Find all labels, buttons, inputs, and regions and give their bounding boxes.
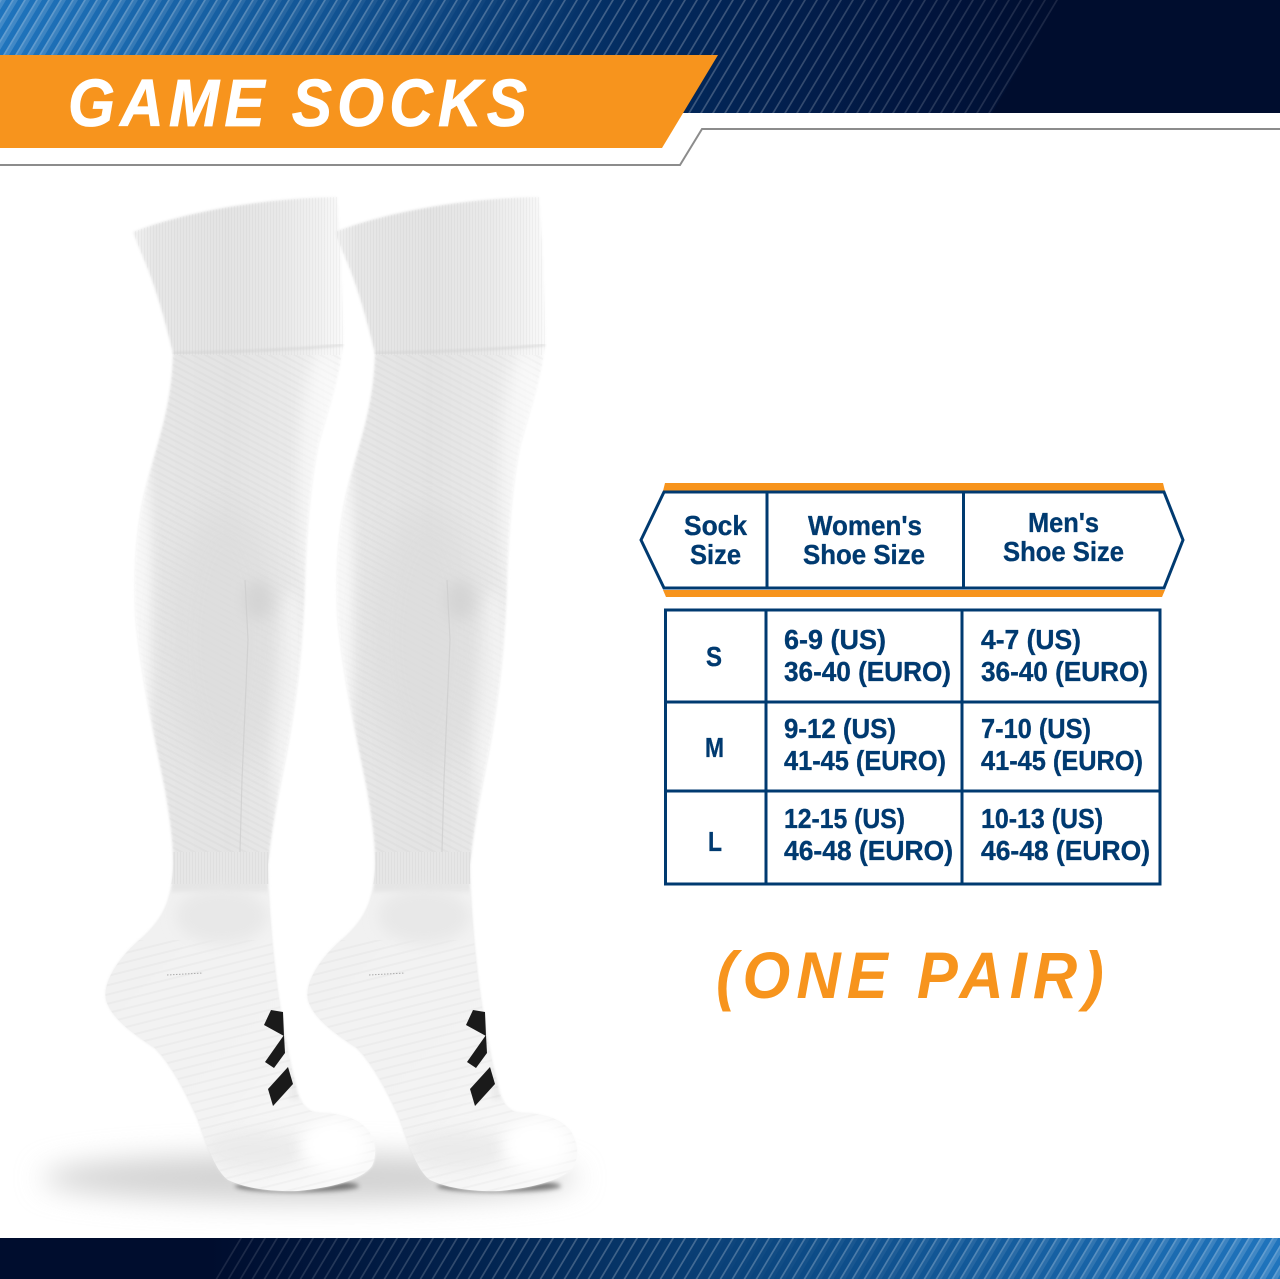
header labels: Size: [690, 539, 741, 570]
sock: right: [302, 190, 602, 1200]
row L: 10-13 (US): [981, 803, 1103, 834]
title: GAME SOCKS: [68, 65, 527, 141]
bottom band: [0, 1238, 1280, 1279]
row M: 41-45 (EURO): [981, 745, 1143, 776]
one pair label: (ONE PAIR): [716, 938, 1104, 1012]
header labels: Men's: [1028, 507, 1099, 538]
row M: [784, 713, 1143, 776]
header labels: Shoe Size: [803, 539, 925, 570]
header labels: Sock: [684, 510, 747, 541]
size table body: [666, 610, 1160, 884]
row S: [784, 624, 1148, 687]
header labels: [684, 507, 1124, 570]
row S: 36-40 (EURO): [981, 656, 1148, 687]
row M: 9-12 (US): [784, 713, 896, 744]
row L: 12-15 (US): [784, 803, 905, 834]
header labels: Shoe Size: [1003, 536, 1124, 567]
header labels: Women's: [808, 510, 922, 541]
header outline: [641, 492, 1183, 588]
row M: 7-10 (US): [981, 713, 1091, 744]
floor shadow: [42, 1154, 578, 1202]
row S: 36-40 (EURO): [784, 656, 951, 687]
size labels: L: [708, 826, 722, 857]
grey offset outline: [0, 129, 1280, 165]
sock: left: [100, 190, 400, 1200]
row L: 46-48 (EURO): [784, 835, 953, 866]
table grid: [666, 610, 1160, 884]
size table header: [641, 483, 1183, 597]
row M: 41-45 (EURO): [784, 745, 946, 776]
top header band: [0, 0, 1280, 113]
row S: 6-9 (US): [784, 624, 886, 655]
row L: [784, 803, 1150, 866]
size labels: S: [706, 641, 722, 672]
orange bottom bar: [663, 590, 1165, 597]
row L: 46-48 (EURO): [981, 835, 1150, 866]
orange top bar: [663, 483, 1165, 491]
size labels: [705, 641, 724, 857]
size labels: M: [705, 732, 724, 763]
title banner: [0, 55, 718, 148]
row S: 4-7 (US): [981, 624, 1081, 655]
